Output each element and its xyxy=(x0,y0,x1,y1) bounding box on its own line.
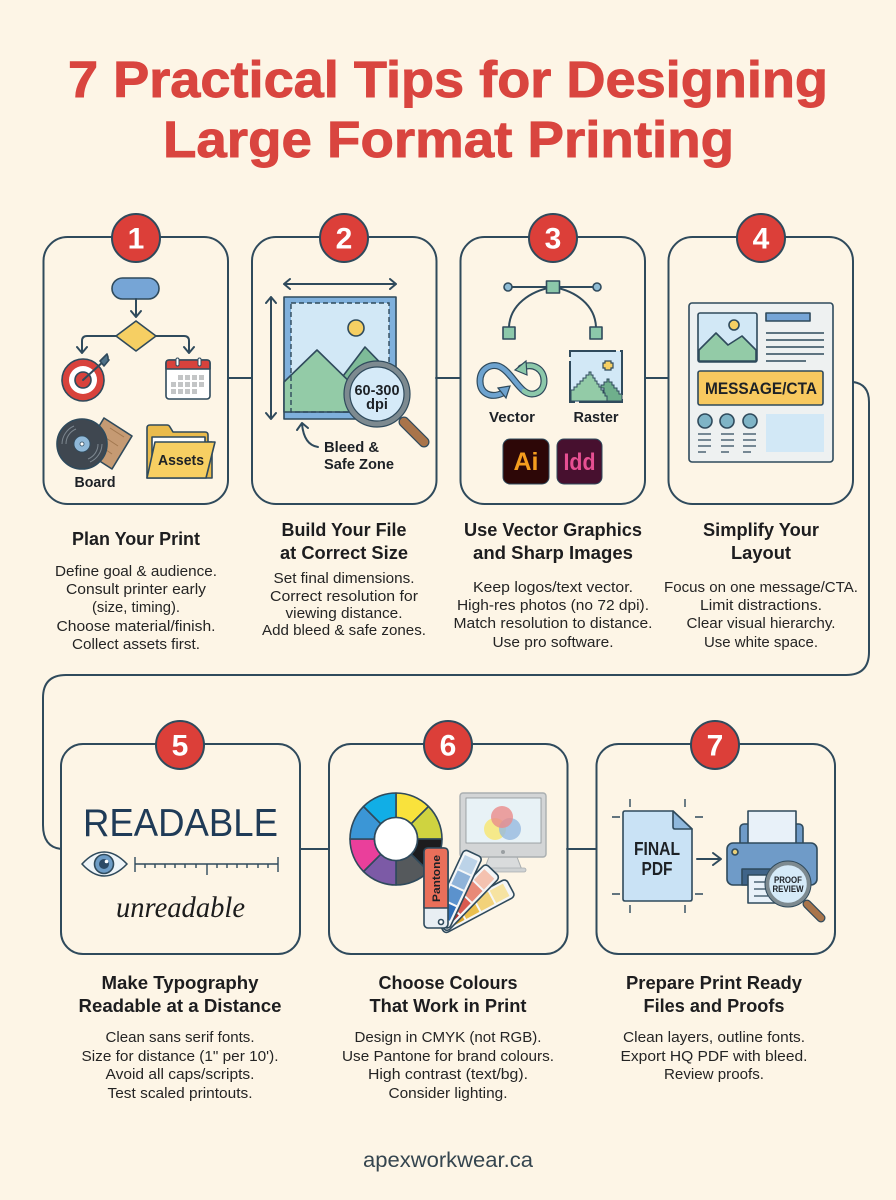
icon: monitor RGB xyxy=(460,793,546,872)
text: step 7: Export HQ PDF with bleed. xyxy=(620,1048,808,1065)
callout: bleed and safe zone xyxy=(297,423,394,473)
badge 4 xyxy=(737,214,785,262)
text: step 2: Add bleed & safe zones. xyxy=(262,622,426,639)
text: step 5 xyxy=(78,973,282,1102)
word: readable: READABLE xyxy=(83,802,278,845)
panel: step 2 build your file xyxy=(252,214,436,504)
text: step 5: Readable at a Distance xyxy=(78,996,282,1016)
icon: eye xyxy=(82,852,127,876)
text: step 3: Match resolution to distance. xyxy=(454,615,652,632)
icon: magnifier 60-300 dpi xyxy=(344,361,424,442)
icon: raster image xyxy=(570,351,622,402)
text: step 3: High-res photos (no 72 dpi). xyxy=(457,597,649,614)
badge 3: 3 xyxy=(545,222,561,256)
text: step 6: Consider lighting. xyxy=(388,1085,508,1102)
text: step 2: Build Your File xyxy=(282,520,406,540)
icon: artwork with safe zone xyxy=(284,297,396,419)
icon: calendar xyxy=(166,358,210,399)
icon: printer with proof review: PROOF xyxy=(774,875,802,885)
badge 4: 4 xyxy=(753,222,770,256)
badge 2: 2 xyxy=(336,222,352,256)
text: step 1: Collect assets first. xyxy=(72,636,200,653)
icon: printer with proof review: REVIEW xyxy=(772,884,804,894)
icon: colour wheel xyxy=(350,793,442,885)
text: step 1: Define goal & audience. xyxy=(55,563,217,580)
process connector line xyxy=(43,378,869,849)
title: 7 Practical Tips for Designing xyxy=(68,51,828,108)
title: Large Format Printing xyxy=(163,111,734,168)
text: step 2: Correct resolution for xyxy=(270,588,418,605)
icon: illustrator: Ai xyxy=(514,448,538,476)
labels: vector and raster xyxy=(489,410,619,426)
badge 2 xyxy=(320,214,368,262)
icon: illustrator xyxy=(503,439,549,484)
text: step 6: That Work in Print xyxy=(370,996,527,1016)
text: step 4: Clear visual hierarchy. xyxy=(686,615,836,632)
text: step 6: Choose Colours xyxy=(378,973,518,993)
panel: step 7 print ready files xyxy=(596,721,835,954)
badge 5: 5 xyxy=(172,730,188,762)
icon: indesign xyxy=(557,439,602,484)
text: step 2: at Correct Size xyxy=(280,543,408,563)
text: step 4: Limit distractions. xyxy=(700,597,822,614)
text: step 1: (size, timing). xyxy=(92,599,180,616)
text: step 6: High contrast (text/bg). xyxy=(368,1066,528,1083)
panel: step 4 simplify layout xyxy=(668,214,853,504)
panel: step 3 vector graphics xyxy=(460,214,645,504)
icon: target xyxy=(62,354,109,401)
icon: assets folder: Assets xyxy=(158,453,204,469)
text: step 6: Design in CMYK (not RGB). xyxy=(354,1029,542,1046)
badge 3 xyxy=(529,214,577,262)
icon: printer with proof review xyxy=(727,811,821,918)
text: step 3 xyxy=(454,520,652,651)
text: step 3: and Sharp Images xyxy=(473,543,633,563)
text: step 7: Clean layers, outline fonts. xyxy=(623,1029,805,1046)
callout: bleed and safe zone: Bleed & xyxy=(324,439,379,456)
label: board: Board xyxy=(74,474,116,491)
title xyxy=(68,51,828,168)
text: step 3: Use Vector Graphics xyxy=(464,520,642,540)
badge 5 xyxy=(156,721,204,769)
icon: bezier curve xyxy=(503,281,602,339)
badge 6: 6 xyxy=(440,730,456,762)
text: step 4: Simplify Your xyxy=(703,520,819,540)
badge 1: 1 xyxy=(128,222,144,256)
labels: vector and raster: Raster xyxy=(574,410,619,426)
icon: final pdf document: PDF xyxy=(642,859,673,879)
text: step 4: Layout xyxy=(731,543,791,563)
icon: pantone swatch fan: Pantone xyxy=(431,855,443,902)
text: step 1: Choose material/finish. xyxy=(56,618,216,635)
icon: magnifier 60-300 dpi: dpi xyxy=(366,397,388,413)
badge 7: 7 xyxy=(707,730,723,762)
text: step 5: Test scaled printouts. xyxy=(108,1085,252,1102)
badge 6 xyxy=(424,721,472,769)
footer website: apexworkwear.ca xyxy=(363,1149,533,1172)
icon: dimension arrows xyxy=(266,279,396,419)
icon: magnifier 60-300 dpi: 60-300 xyxy=(354,383,400,399)
text: step 1: Plan Your Print xyxy=(72,529,200,549)
icon: final pdf document xyxy=(612,799,703,913)
text: step 5: Avoid all caps/scripts. xyxy=(106,1066,255,1083)
panel: step 5 typography xyxy=(61,721,300,954)
text: step 5: Size for distance (1" per 10'). xyxy=(82,1048,278,1065)
text: step 2 xyxy=(262,520,426,639)
text: step 1 xyxy=(55,529,217,653)
text: step 7: Files and Proofs xyxy=(644,996,784,1016)
icon: layout page: MESSAGE/CTA xyxy=(705,380,817,398)
text: step 7 xyxy=(620,973,808,1083)
arrow to printer xyxy=(697,853,721,865)
icon: flowchart xyxy=(77,278,194,353)
text: step 2: Set final dimensions. xyxy=(274,570,414,587)
icon: indesign: Idd xyxy=(564,449,596,476)
badge 1 xyxy=(112,214,160,262)
icon: assets folder xyxy=(147,425,215,478)
icon: vector infinity xyxy=(480,361,544,398)
text: step 6 xyxy=(342,973,554,1102)
panel: step 1 plan your print xyxy=(44,214,228,504)
text: step 3: Keep logos/text vector. xyxy=(473,579,633,596)
callout: bleed and safe zone: Safe Zone xyxy=(324,456,394,473)
text: step 7: Review proofs. xyxy=(664,1066,764,1083)
labels: vector and raster: Vector xyxy=(489,410,535,426)
panel: step 6 colours xyxy=(329,721,568,954)
badge 7 xyxy=(691,721,739,769)
text: step 7: Prepare Print Ready xyxy=(626,973,802,993)
icon: final pdf document: FINAL xyxy=(634,839,680,859)
text: step 1: Consult printer early xyxy=(66,581,207,598)
icon: distance ruler xyxy=(135,857,278,875)
word: unreadable: unreadable xyxy=(116,891,245,924)
text: step 4 xyxy=(664,520,858,651)
text: step 5: Clean sans serif fonts. xyxy=(106,1029,254,1046)
text: step 2: viewing distance. xyxy=(286,605,402,622)
icon: layout page xyxy=(689,303,833,462)
text: step 5: Make Typography xyxy=(102,973,258,993)
icon: vinyl and wood board xyxy=(57,418,132,469)
icon: pantone swatch fan xyxy=(424,848,515,934)
text: step 4: Focus on one message/CTA. xyxy=(664,579,858,596)
text: step 4: Use white space. xyxy=(704,634,818,651)
text: step 3: Use pro software. xyxy=(492,634,614,651)
text: step 6: Use Pantone for brand colours. xyxy=(342,1048,554,1065)
